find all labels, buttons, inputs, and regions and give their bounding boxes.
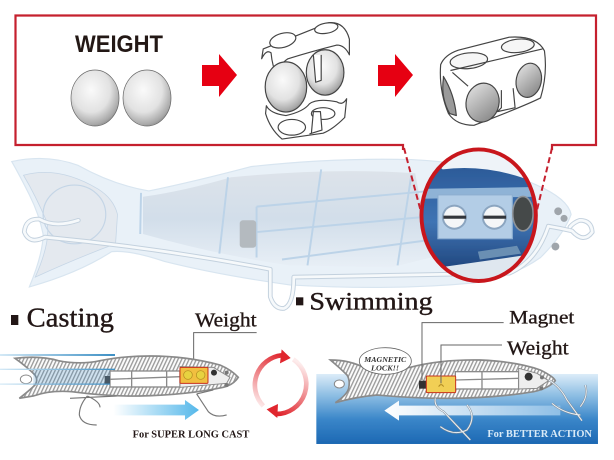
head cavity <box>180 367 230 387</box>
tail eye <box>334 380 344 388</box>
dark joint <box>240 220 256 248</box>
cavity <box>110 371 180 387</box>
icon: open cage with balls <box>262 21 349 139</box>
ribs and rails <box>140 169 431 265</box>
icon: two weight balls <box>71 70 171 126</box>
frame ribs <box>455 372 519 389</box>
hooks <box>70 390 227 425</box>
heading: Casting: Casting <box>27 303 114 333</box>
leader line <box>194 333 257 367</box>
caption: For SUPER LONG CAST <box>133 429 250 441</box>
leader lines <box>422 323 504 383</box>
heading: Swimming: Swimming <box>309 288 433 315</box>
label: Weight: Weight <box>195 310 257 332</box>
panel: weight assembly sequence <box>16 16 596 150</box>
tail interior <box>24 172 118 277</box>
lure: clear body with magnified view <box>12 148 592 308</box>
clear weight block <box>438 195 512 239</box>
arrow: direction of swimming <box>384 401 560 421</box>
ball in block left <box>442 205 467 230</box>
cycle arrows <box>255 349 306 418</box>
arrow: cage to assembled block <box>378 54 413 97</box>
icon: assembled cage <box>440 37 545 125</box>
body interior shading <box>143 171 431 267</box>
magnet <box>211 370 217 376</box>
panel: swimming <box>296 288 598 444</box>
speech bubble: magnetic lock <box>359 348 411 374</box>
dashed callout line right <box>537 148 552 210</box>
head details <box>552 207 568 250</box>
front magnet <box>525 373 533 381</box>
panel: casting <box>0 303 306 441</box>
red frame with gap at the bottom <box>16 16 596 150</box>
weight block <box>180 367 208 383</box>
speed lines <box>0 354 115 385</box>
ball in block right <box>482 205 507 230</box>
hooks <box>435 380 586 440</box>
caption: For BETTER ACTION <box>487 428 592 440</box>
tail ring detail <box>43 185 106 244</box>
speech bubble: magnetic lock: LOCK!! <box>370 363 399 372</box>
swimming bullet <box>296 297 303 305</box>
arrow: direction of cast <box>113 400 199 420</box>
frame ribs <box>110 371 180 387</box>
sea background <box>316 374 598 444</box>
weight block <box>426 376 456 393</box>
label: Weight: Weight <box>507 337 569 359</box>
rear magnet <box>419 381 426 389</box>
hooks outline <box>435 380 586 440</box>
cavity <box>455 372 519 389</box>
dashed callout line left <box>404 148 421 212</box>
heading: WEIGHT: WEIGHT <box>75 31 163 58</box>
eyes <box>539 375 544 390</box>
rear magnet <box>105 376 110 384</box>
label: Magnet: Magnet <box>509 307 575 328</box>
red lens ring <box>421 149 536 281</box>
wire frame with eyes and hook hanger <box>24 219 592 308</box>
tail eye <box>20 375 32 384</box>
lure body <box>12 158 571 287</box>
casting bullet <box>11 315 18 325</box>
head cavity <box>519 368 549 389</box>
eyes <box>225 371 229 387</box>
speech bubble: magnetic lock: MAGNETIC <box>363 355 406 364</box>
magnet <box>513 196 533 231</box>
lure cutaway <box>15 356 238 398</box>
magnified lens contents <box>423 152 534 279</box>
arrow: balls to cage <box>202 54 237 97</box>
lure cutaway <box>330 360 555 403</box>
wire frame outline <box>24 219 592 308</box>
